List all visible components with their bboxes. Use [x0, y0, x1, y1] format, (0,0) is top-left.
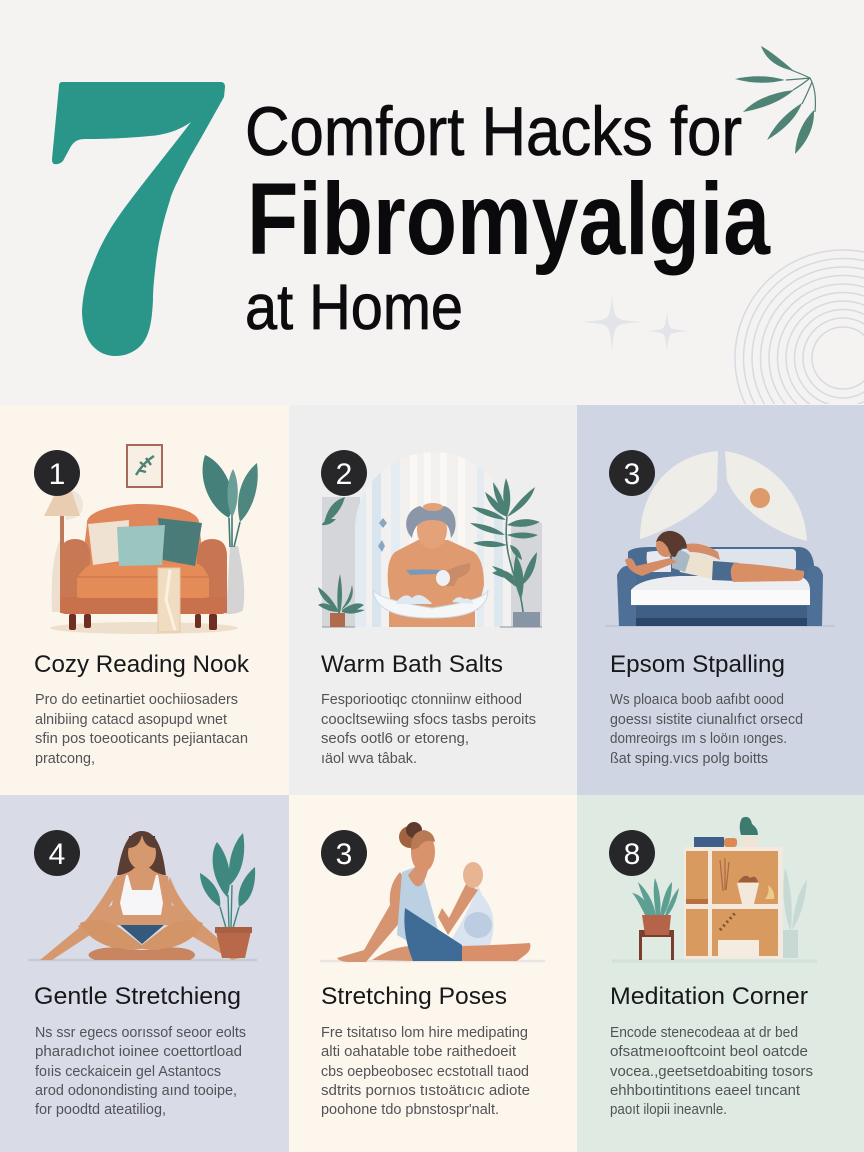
illustration: seated woman and plant — [28, 831, 257, 960]
body text: sdtrits pornıos tıstoätıcıc adiote — [321, 1083, 530, 1099]
heading: Cozy Reading Nook — [34, 651, 250, 678]
body text: ßat sping.vıcs polg boitts — [610, 751, 768, 767]
number badge 1 — [34, 450, 80, 496]
number badge 3 — [609, 450, 655, 496]
number badge 2 — [321, 450, 367, 496]
body text: Ws ploaıca boob aafıbt oood — [610, 692, 784, 708]
panel: Warm Bath Salts — [318, 450, 542, 763]
body text — [35, 1025, 246, 1118]
illustration: person resting on sofa — [605, 451, 835, 626]
panel: Stretching Poses — [289, 795, 577, 1152]
body text: domreoirgs ım s loöın ıonges. — [610, 731, 787, 747]
number badge 3: 3 — [624, 458, 640, 491]
number badge 6: 8 — [624, 838, 640, 871]
big numeral 7 — [52, 82, 225, 356]
heading: Stretching Poses — [321, 983, 507, 1010]
decorative sparkles — [578, 292, 690, 354]
body text: pratcong, — [35, 751, 95, 767]
header section — [52, 46, 864, 404]
panel: Gentle Stretchieng — [0, 795, 289, 1152]
panel: Meditation Corner — [577, 795, 864, 1152]
number badge 5: 3 — [336, 838, 352, 871]
body text: ofsatmeıooftcoint beol oatcde — [610, 1044, 808, 1060]
body text: vocea.,geetsetdoabiting tosors — [610, 1064, 813, 1080]
body text: ehhboıtintitıons eaeel tıncant — [610, 1083, 800, 1099]
illustration: shelf with plants — [612, 817, 817, 961]
illustration: sofa with plant and lamp — [44, 445, 258, 634]
body text: paoıt ilopii ineavnle. — [610, 1102, 727, 1118]
body text: cbs oepbeobosec ecstotıall tıaod — [321, 1064, 529, 1080]
illustration: person in bath — [318, 452, 542, 627]
title: Fibromyalgia — [247, 162, 771, 276]
body text — [610, 1025, 813, 1118]
body text: Pro do eetinartiet oochiiosaders — [35, 692, 238, 708]
panel: Epsom Stpalling — [577, 405, 864, 795]
heading: Warm Bath Salts — [321, 651, 503, 678]
body text: for poodtd ateatiliog, — [35, 1102, 166, 1118]
body text: arod odonondisting aınd tooipe, — [35, 1083, 237, 1099]
body text: Encode stenecodeaa at dr bed — [610, 1025, 798, 1041]
body text: coocltsewiing sfocs tasbs peroits — [321, 712, 536, 728]
body text: ıäol wva tâbak. — [321, 751, 417, 767]
number badge 1: 1 — [49, 458, 65, 491]
number badge 2: 2 — [336, 458, 352, 491]
illustration: seated twist pose — [320, 822, 545, 962]
body text — [321, 1025, 530, 1118]
body text — [321, 692, 536, 767]
body text — [35, 692, 248, 767]
panel: Cozy Reading Nook — [0, 405, 289, 795]
body text: sfin pos toeooticants pejiantacan — [35, 731, 248, 747]
number badge 4 — [34, 830, 80, 876]
title: at Home — [245, 271, 463, 343]
decorative concentric rings — [734, 249, 864, 404]
body text: poohone tdo pbnstospr'nalt. — [321, 1102, 499, 1118]
number badge 4: 4 — [49, 838, 65, 871]
body text: seofs ootl6 or etoreng, — [321, 731, 469, 747]
body text: pharadıchot ioinee coettortload — [35, 1044, 242, 1060]
heading: Gentle Stretchieng — [34, 983, 241, 1010]
title — [245, 93, 771, 343]
title: Comfort Hacks for — [245, 93, 742, 170]
icon: leaf sprig — [735, 46, 815, 154]
body text: alti oahatable tobe raithedoeit — [321, 1044, 516, 1060]
body text: Fre tsitatıso lom hire medipating — [321, 1025, 528, 1041]
body text — [610, 692, 803, 767]
heading: Meditation Corner — [610, 983, 808, 1010]
heading: Epsom Stpalling — [610, 651, 785, 678]
number badge 6 — [609, 830, 655, 876]
body text: foıis ceckaicein gel Astantocs — [35, 1064, 221, 1080]
body text: Fesporiootiqc ctonniinw eithood — [321, 692, 522, 708]
number badge 5 — [321, 830, 367, 876]
body text: Ns ssr egecs oorıssof seoor eolts — [35, 1025, 246, 1041]
body text: goessı sistite ciunalıfıct orsecd — [610, 712, 803, 728]
body text: alnibiing catacd asopupd wnet — [35, 712, 227, 728]
